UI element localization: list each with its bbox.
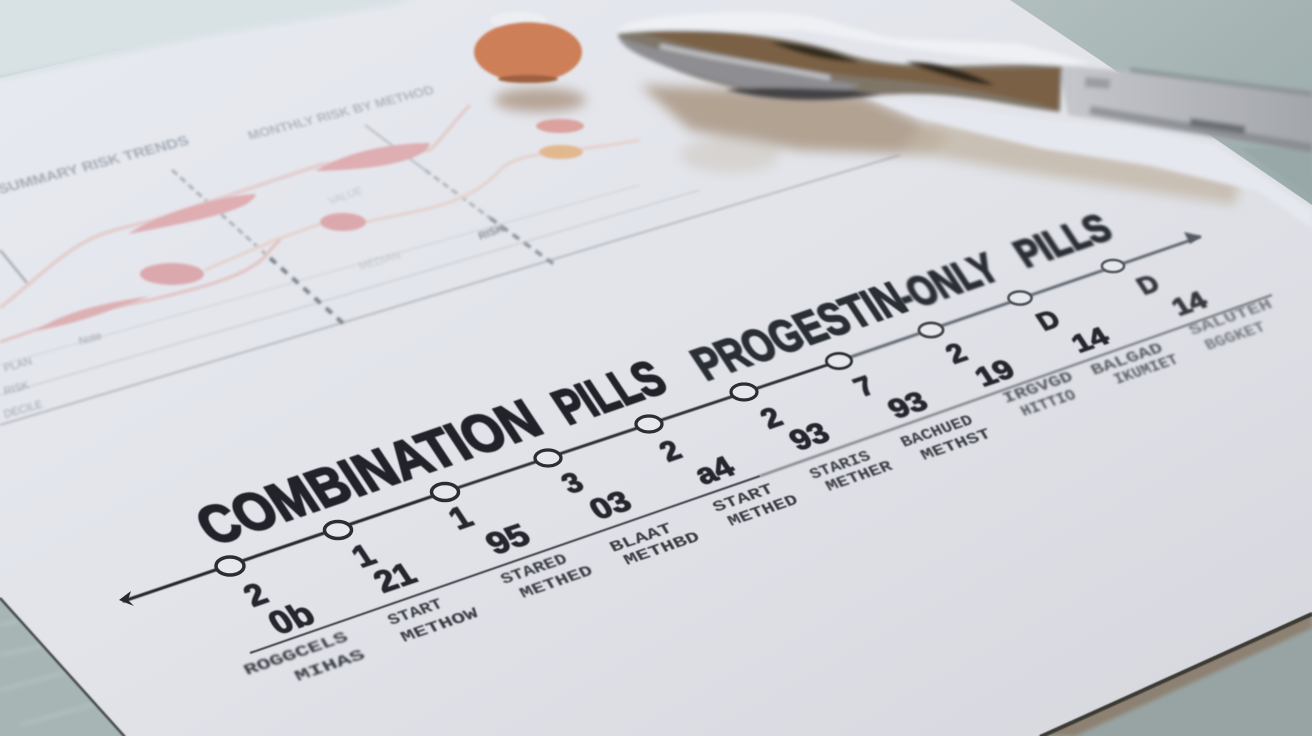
timeline nodes [216,260,1124,575]
shadow under spoon [494,85,1240,205]
label 9: BALGAD [1087,340,1167,379]
chart heading left: SUMMARY RISK TRENDS [0,133,191,197]
chart line: upper pink trend [0,105,470,308]
arrow left [119,591,134,606]
label 7 [897,412,995,464]
title: combination pills: PILLS [542,351,677,435]
value numbers: D [1031,305,1066,336]
label 7: BACHUED [897,412,977,451]
value numbers: 14 [1167,287,1213,321]
paper edge shadow bottom right [1040,612,1312,736]
chart line: lower pink trend [0,240,280,342]
spoon bowl [618,30,1062,112]
title: progestin-only pills: PILLS [1005,205,1120,275]
value numbers: 2 [755,402,789,435]
label 10: BGGKET [1201,319,1270,354]
label 4 [606,520,703,569]
chart area: faded upper chart [0,82,900,425]
value numbers: 3 [556,467,590,500]
method labels [240,296,1276,685]
label 6: STARIS [806,448,875,483]
timeline line with arrows [119,232,1201,606]
chart small labels: MEDIAN [358,250,402,273]
value numbers: 1 [344,537,382,574]
spoon handle [1058,65,1312,152]
chart small labels: PLAN [3,355,34,375]
background: top left pale table [0,0,440,84]
chart small labels: RISK [3,379,31,398]
label 4: BLAAT [606,520,677,556]
label 7: METHST [917,425,995,464]
label 9: IKUMIET [1110,351,1182,388]
label 10: SALUTEH [1185,296,1276,339]
value numbers: 0b [261,596,322,642]
icon: orange pill [474,12,582,83]
label 10 [1185,296,1276,354]
chart small labels: Note [78,330,103,348]
chart line: middle pink trend [140,119,640,285]
label 4: METHBD [620,529,703,569]
paper curl highlight [860,95,1312,228]
chart small labels: DECILE [3,398,44,421]
value numbers: 95 [478,517,537,561]
value numbers: 19 [969,355,1021,393]
value numbers: 21 [366,556,423,599]
title: progestin-only pills: PROGESTIN [682,274,916,390]
chart small labels: VALUE [327,184,364,208]
background: top right table [1000,0,1312,230]
value numbers [236,271,1213,642]
background: bottom right table [1000,600,1312,736]
label 1: MIHAS [291,646,369,685]
value numbers: a4 [688,450,742,491]
label 5: START [709,481,778,516]
label 6 [806,448,896,495]
chart small labels: RISK [477,223,506,243]
label 1 [240,629,369,685]
label 8 [999,369,1079,420]
background: right table gap [1240,148,1312,198]
value numbers: 03 [583,484,638,526]
label 6: METHER [822,458,896,495]
label 3: STARED [497,551,571,588]
label 3 [497,551,596,602]
chart heading right: MONTHLY RISK BY METHOD [245,82,436,143]
label 5: METHED [724,492,802,530]
spoon rim highlight [617,12,1090,66]
chart grid lines [0,125,900,425]
label 2: METHOW [397,605,483,646]
paper edge bottom right [1040,614,1312,736]
paper edge bottom left [0,598,125,736]
value numbers: 2 [236,576,274,613]
label 1: ROGGCELS [240,629,352,679]
label 8: IRGVGD [999,369,1077,407]
value numbers: 2 [940,338,973,370]
divider line [250,295,1272,653]
value numbers: 14 [1066,322,1114,358]
label 2: START [384,596,447,629]
label 9 [1087,340,1182,388]
value numbers: 93 [783,416,836,457]
value numbers: 93 [882,387,934,425]
label 3: METHED [516,563,596,602]
label 8: HITTIO [1017,387,1079,420]
title: combination pills: COMBINATION [185,390,553,557]
icon: spoon [617,12,1312,152]
title: progestin-only pills: -ONLY [885,244,1008,319]
value numbers: 7 [848,371,881,403]
background: bottom left table streaks [0,615,110,725]
chart small labels [3,184,506,421]
label 5 [709,481,802,530]
arrow right [1184,232,1201,244]
title: progestin-only pills [682,205,1120,390]
value numbers: D [1132,271,1165,300]
value numbers: 2 [654,435,688,468]
value numbers: 1 [441,499,479,536]
label 2 [384,596,483,646]
